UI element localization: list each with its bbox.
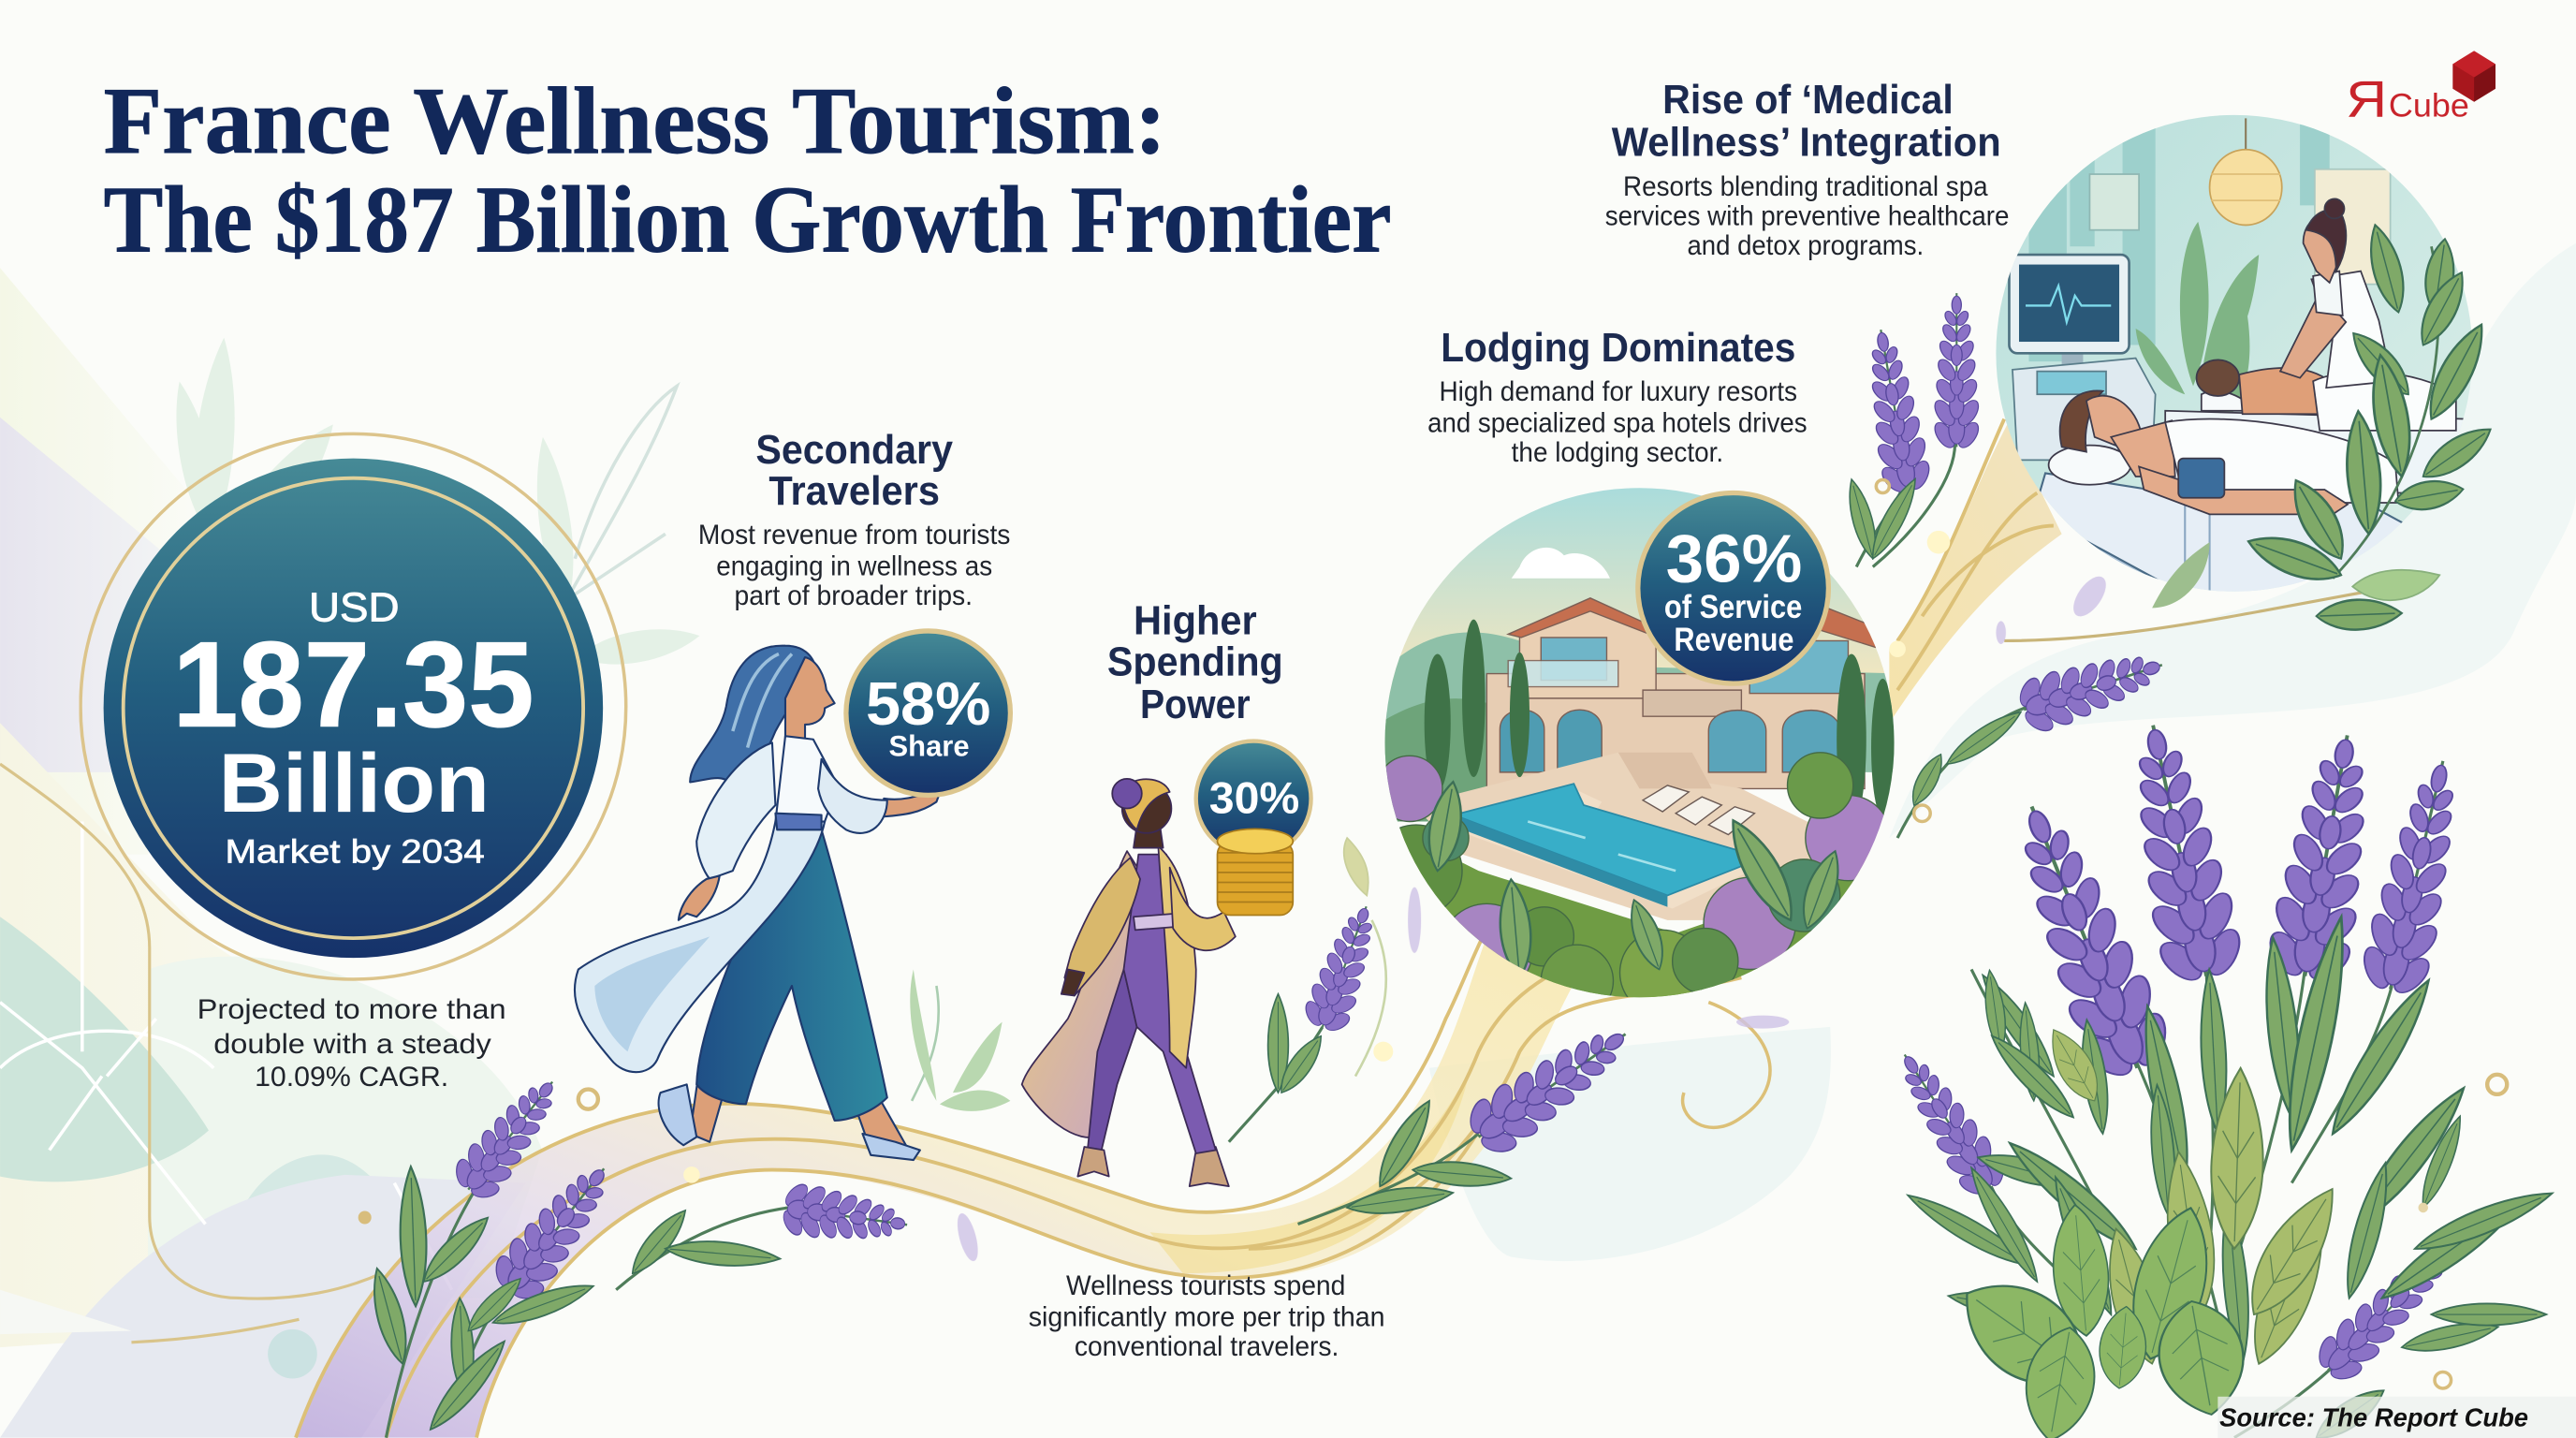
logo: RCube: Cube [2389,88,2469,125]
text: wellness tourists spend [1029,1270,1385,1362]
title: France Wellness Tourism: [104,68,1166,174]
shrubs [1385,752,1884,998]
front bed [2039,472,2403,592]
badge: 36% of service revenue: Revenue [1674,622,1794,658]
text: higher spending power heading: Power [1140,682,1251,727]
basil leaves [2048,1202,2114,1338]
text: secondary travelers: Secondary [755,427,954,473]
text: secondary travelers [698,427,1010,611]
market value text: 187.35 [172,616,534,753]
panel: villa illustration [1370,485,1906,1017]
source credit: Source: The Report Cube [2219,1402,2528,1431]
text: wellness tourists spend: conventional travelers. [1075,1331,1339,1362]
text: higher spending power heading: Spending [1107,638,1283,684]
text: medical wellness integration: services with preventive healthcare [1605,200,2009,231]
text: medical wellness integration: Wellness’ Integration [1612,120,2001,166]
badge: 58% share: Share [889,728,970,762]
text: market projection [198,994,506,1093]
market value text: Billion [218,736,490,829]
text: secondary travelers: Travelers [768,468,940,514]
background shapes: right wash [1429,243,2576,1261]
title: The $187 Billion Growth Frontier [104,168,1392,273]
badge: 36% of service revenue: of Service [1664,589,1802,625]
nurse [2280,198,2392,388]
text: higher spending power heading: Higher [1134,597,1257,643]
text: wellness tourists spend: Wellness tourists spend [1066,1270,1345,1301]
stems [1971,969,2392,1438]
icon: gold coin stack [1218,829,1293,916]
hills [1380,632,1906,772]
small plant by walkers [910,969,1010,1111]
logo: RCube [2346,51,2496,128]
machine [2012,359,2156,460]
text: medical wellness integration [1605,77,2009,261]
cypress trees [1425,620,1895,825]
inner gold ring [124,478,583,938]
back patient on table [2165,360,2465,493]
icon: lavender sprigs mid [1229,838,1646,1224]
market value text: USD [309,584,400,630]
wall plant [2136,222,2259,431]
badge: 30% spending [1196,741,1311,856]
text: lodging dominates: and specialized spa hotels drives [1427,408,1808,439]
background shapes: left wash [0,268,598,1438]
room [1988,107,2481,600]
long leaves [1974,969,2062,1082]
pool [1454,784,1763,895]
text: market projection: double with a steady [213,1029,491,1060]
text: lodging dominates [1427,325,1808,468]
text: wellness tourists spend: significantly more per trip than [1029,1301,1385,1332]
badge: 36% of service revenue [1638,493,1828,683]
logo: RCube: Я [2346,71,2387,128]
badge: 58% share: 58% [866,669,990,738]
figure: woman in purple [1022,779,1236,1186]
market value text [172,584,534,870]
monitor [2009,255,2130,370]
text: secondary travelers: part of broader trips. [735,580,973,611]
source strip [2217,1397,2576,1438]
flower spikes [1986,788,2185,1091]
front patient [2049,390,2398,514]
panel: market size circle [80,433,626,979]
icon: lavender sprig right of villa [1897,634,2172,838]
serrated olive leaves [2208,1067,2266,1250]
market value text: Market by 2034 [225,833,485,870]
text: higher spending power heading [1107,597,1283,727]
badge: 58% share [846,631,1010,795]
text: secondary travelers: engaging in wellness as [716,550,992,581]
figure: woman in blue [575,646,942,1160]
steps and terrace [1412,753,1889,920]
panel: medical wellness illustration [1988,107,2481,611]
pendant lamp [2210,118,2282,225]
branch with pale leaves [2152,542,2439,631]
title [104,68,1392,273]
loungers [1643,785,1754,835]
sky [1380,485,1906,698]
decorative pale leaves, top left [165,336,702,672]
text: medical wellness integration: and detox programs. [1687,230,1924,261]
text: medical wellness integration: Rise of ‘Medical [1662,77,1954,123]
text: lodging dominates: Lodging Dominates [1441,325,1795,371]
lawn [1400,831,1861,998]
floor [2037,526,2169,608]
badge: 30% spending: 30% [1209,774,1299,824]
text: medical wellness integration: Resorts blending traditional spa [1623,171,1988,202]
navy badge [104,459,603,958]
text: lodging dominates: the lodging sector. [1512,437,1723,468]
outer gold ring [80,433,626,979]
illustration: large lavender plant [1881,715,2556,1438]
villa building [1486,594,1889,788]
icon: lavender by medical circle [1842,293,1983,566]
flowing ribbon: lilac and gold [296,419,2415,1438]
leaf branch around medical circle [2243,221,2498,591]
text: market projection: 10.09% CAGR. [255,1062,448,1093]
gold rings [2487,1075,2507,1094]
text: lodging dominates: High demand for luxury resorts [1439,376,1797,407]
badge: 36% of service revenue: 36% [1666,521,1802,596]
icon: lavender sprigs bottom left [365,1064,912,1438]
text: market projection: Projected to more than [198,994,506,1025]
text: secondary travelers: Most revenue from tourists [698,520,1010,550]
cloud [1512,548,1610,579]
